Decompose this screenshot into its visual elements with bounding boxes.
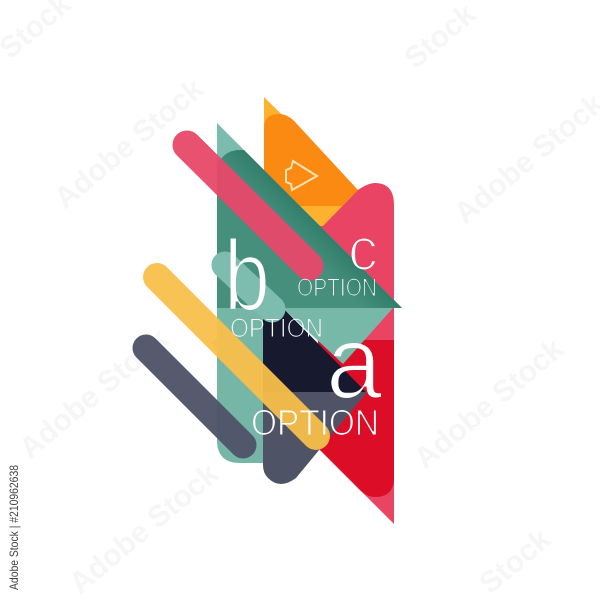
light teal triangle <box>283 308 393 364</box>
stock id: Adobe Stock | #210962638 <box>7 465 21 590</box>
pink bar <box>187 145 309 266</box>
light teal pill <box>225 265 272 309</box>
background watermark: Adobe Stock <box>13 322 175 465</box>
orange triangle with arrow <box>264 97 365 240</box>
yellow bar <box>157 277 316 436</box>
red panel: option c and a <box>318 183 394 524</box>
letter b: b <box>224 220 270 332</box>
label: option c: OPTION <box>297 274 377 302</box>
background watermark: Stock <box>473 522 557 600</box>
letter c: c <box>348 216 378 283</box>
grey bar <box>146 348 243 445</box>
background watermark: Adobe Stock <box>48 72 210 215</box>
icon: arrow outline <box>286 161 317 190</box>
background watermark: Adobe Stock <box>63 457 225 600</box>
label: option a: OPTION <box>251 402 379 443</box>
letter a: a <box>326 305 382 421</box>
background watermark: Adobe Stock <box>408 332 570 475</box>
navy panel <box>263 300 367 484</box>
small orange mark <box>211 338 217 349</box>
label: option b: OPTION <box>230 313 323 343</box>
lower teal block <box>217 308 263 463</box>
green panel: option b <box>217 123 402 308</box>
